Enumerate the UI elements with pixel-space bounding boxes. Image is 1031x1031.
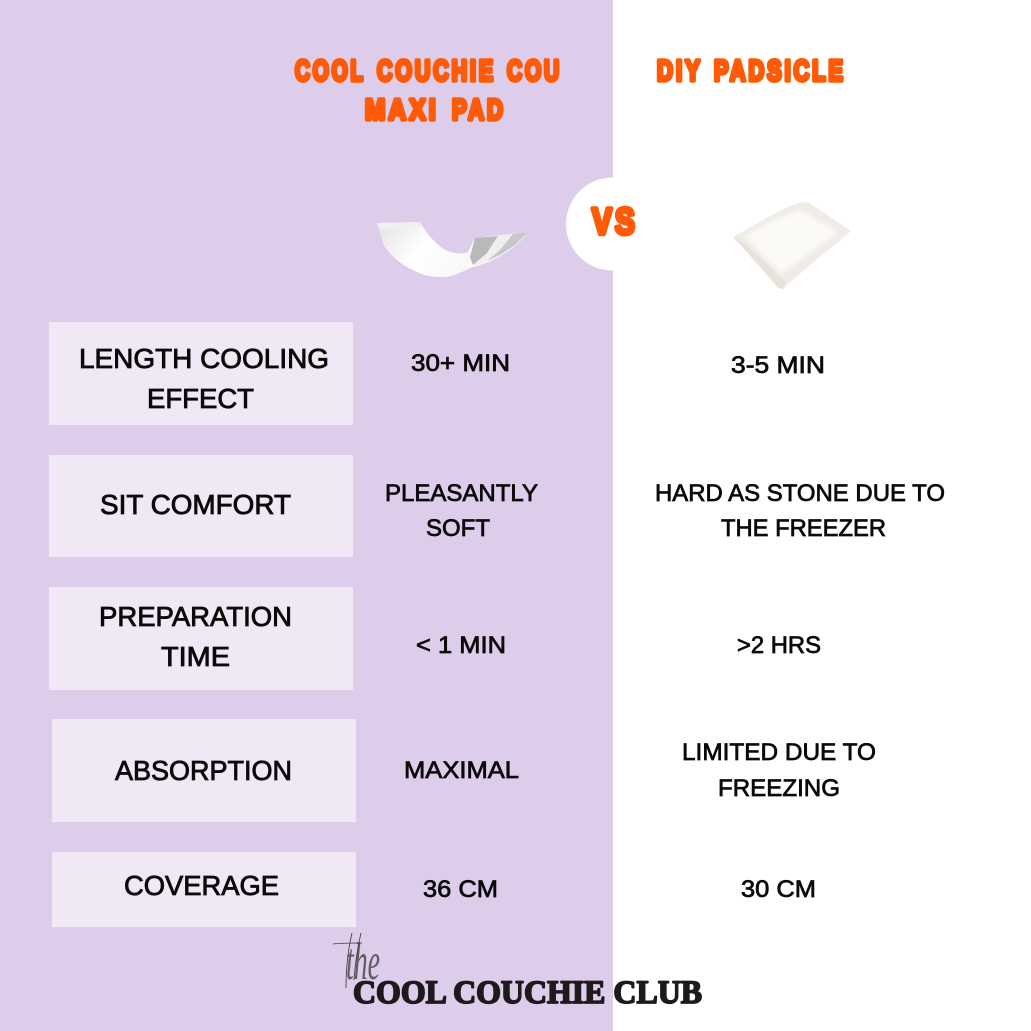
row 1: Length cooling effect: [49, 322, 825, 425]
value: hard as stone: [655, 480, 945, 542]
value: under 1 min: < 1 MIN: [416, 632, 506, 659]
value: 30 cm: 30 CM: [741, 876, 816, 903]
label panel: length cooling effect: EFFECT: [147, 383, 254, 414]
row 4: Absorption: [52, 719, 876, 822]
heading: Cool Couchie Cou Maxi Pad: COUCHIE: [377, 56, 496, 88]
VS badge: VS: [592, 201, 638, 242]
label panel: preparation time: PREPARATION: [99, 601, 292, 632]
value: hard as stone: HARD AS STONE DUE TO: [655, 480, 945, 507]
logo: The Cool Couchie Club: COOL COUCHIE CLUB: [353, 975, 702, 1011]
heading: Cool Couchie Cou Maxi Pad: COOL: [295, 56, 366, 88]
value: 36 cm: 36 CM: [423, 876, 498, 903]
heading: Cool Couchie Cou Maxi Pad: COU: [507, 56, 562, 88]
label panel: sit comfort: SIT COMFORT: [100, 489, 291, 520]
logo: The Cool Couchie Club: the: [346, 934, 380, 991]
heading: Cool Couchie Cou Maxi Pad: PAD: [452, 94, 506, 126]
heading: DIY Padsicle: [657, 56, 846, 88]
label panel: absorption: ABSORPTION: [115, 755, 292, 786]
heading: Cool Couchie Cou Maxi Pad: [295, 56, 562, 126]
value: limited due to freezing: FREEZING: [718, 775, 840, 802]
row 5: Coverage: [52, 852, 816, 927]
logo: The Cool Couchie Club: [333, 933, 702, 1011]
VS badge: [566, 178, 659, 270]
value: pleasantly soft: PLEASANTLY: [385, 480, 538, 507]
label panel: coverage: [52, 852, 356, 927]
value: hard as stone: THE FREEZER: [721, 515, 886, 542]
background: white right panel: [613, 0, 1031, 1031]
label panel: length cooling effect: [49, 322, 353, 425]
label panel: coverage: COVERAGE: [124, 870, 279, 901]
value: limited due to freezing: LIMITED DUE TO: [682, 739, 876, 766]
row 2: Sit comfort: [49, 455, 945, 557]
label panel: preparation time: TIME: [161, 641, 230, 672]
row 3: Preparation time: [49, 587, 821, 690]
value: 3-5 min: 3-5 MIN: [731, 352, 825, 379]
heading: Cool Couchie Cou Maxi Pad: MAXI: [365, 94, 439, 126]
background: purple left panel: [0, 0, 613, 1031]
value: 30+ min: 30+ MIN: [411, 350, 510, 377]
label panel: absorption: [52, 719, 356, 822]
value: limited due to freezing: [682, 739, 876, 802]
label panel: length cooling effect: LENGTH COOLING: [79, 343, 329, 374]
icon: frozen DIY padsicle bag: [733, 202, 851, 289]
heading: DIY Padsicle: DIY: [657, 56, 703, 88]
heading: DIY Padsicle: PADSICLE: [714, 56, 846, 88]
value: over 2 hrs: >2 HRS: [737, 632, 821, 659]
label panel: preparation time: [49, 587, 353, 690]
label panel: sit comfort: [49, 455, 353, 557]
icon: curved maxi pad: [377, 222, 528, 277]
value: pleasantly soft: [385, 480, 538, 542]
value: pleasantly soft: SOFT: [426, 515, 490, 542]
value: maximal: MAXIMAL: [404, 757, 519, 784]
